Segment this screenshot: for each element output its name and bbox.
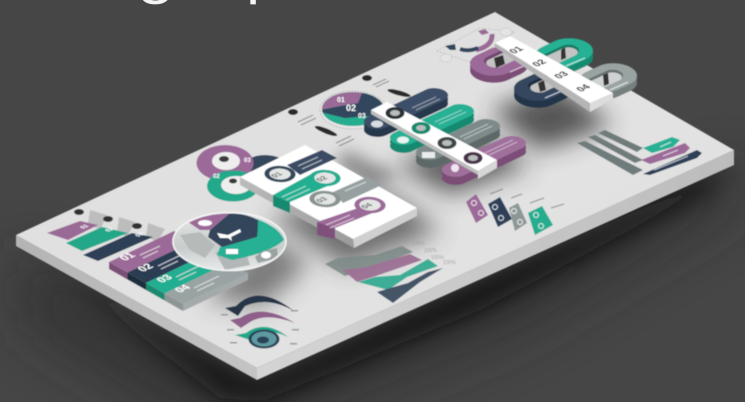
card captions: [490, 189, 564, 208]
panel: 3D pills with white bar: [358, 85, 532, 188]
card navy: [488, 197, 512, 227]
mauve donut: [196, 145, 254, 181]
strap 03 gray: [333, 177, 382, 203]
ribbon labels: 03: [135, 232, 146, 238]
bar icon 04: [464, 152, 482, 164]
lens map and wedges: [180, 213, 284, 270]
pie labels: 01: [337, 97, 345, 104]
card right side: [353, 208, 417, 248]
pill teal: [384, 101, 480, 156]
bar icon centers: [390, 110, 478, 161]
panel: L-shaped chevrons right: [577, 130, 702, 175]
bar icon 02: [412, 122, 430, 134]
card mauve: [466, 194, 488, 223]
strap 04 mauve: [317, 208, 380, 239]
mauve band: [343, 254, 422, 282]
stripe labels: [117, 251, 194, 294]
band labels: 100%: [431, 255, 444, 261]
dotted outline: [437, 28, 515, 62]
soft shadows on board: [205, 85, 612, 305]
stripe 04: [164, 262, 248, 304]
donut labels: [213, 158, 251, 180]
bar icon 01: [386, 107, 404, 119]
panel: striped block with lens: [109, 212, 286, 311]
teal donut center: [221, 176, 251, 194]
navy tab: [445, 44, 456, 50]
stripe captions: [140, 246, 219, 291]
teal donut icon: [229, 178, 237, 184]
callout circles: [440, 28, 512, 62]
U gray: [570, 58, 646, 105]
stripe labels: 01: [117, 251, 139, 262]
glass lens: [173, 212, 286, 270]
gray folded tabs: [88, 210, 165, 242]
teal donut: [207, 170, 259, 202]
board drop shadow: [16, 165, 745, 402]
card gray: [509, 203, 527, 231]
card top: [240, 145, 417, 239]
navy arc: [225, 296, 294, 316]
badge 01: [258, 162, 302, 186]
bar numbers: 03: [552, 70, 572, 81]
navy arc segment: [460, 48, 478, 50]
bar numbers: [507, 45, 594, 94]
card teal: [528, 206, 553, 235]
chevron mauve: [641, 143, 690, 164]
pie labels: 03: [358, 113, 366, 120]
badge 03: 03: [314, 196, 330, 204]
mauve donut icon: [219, 156, 229, 162]
pie labels: 02: [346, 103, 356, 113]
pill navy: [358, 85, 454, 140]
band labels: 100%: [412, 241, 425, 247]
navy band: [377, 268, 443, 303]
globe land: [252, 332, 276, 346]
band labels: [412, 241, 456, 266]
mauve arc: [230, 312, 295, 328]
teal band: [358, 259, 438, 290]
badge 04: 04: [359, 202, 375, 210]
gray band: [325, 246, 413, 276]
stripe sides: [109, 262, 183, 311]
ribbon 02: [66, 227, 128, 251]
pie slices: [322, 92, 384, 126]
stripe 01: [109, 231, 192, 272]
card left side: [240, 177, 354, 248]
stripe labels: 02: [135, 262, 157, 273]
panel: mini arc diagram top: [437, 28, 515, 62]
badge 02: [303, 166, 347, 190]
badge 02: 02: [314, 175, 330, 183]
ribbon 03: [83, 233, 153, 261]
mauve donut center: [212, 152, 240, 170]
lens icons: [198, 220, 271, 258]
globe: [248, 330, 280, 348]
stripe labels: 04: [172, 283, 194, 294]
panel: U shapes with numbered bar: [461, 33, 646, 113]
mauve arc: [476, 34, 492, 50]
badge 03: [303, 187, 347, 211]
icon blobs: [74, 209, 142, 229]
panel: pie chart with callouts: [288, 75, 411, 146]
numbered bar: [495, 36, 613, 112]
ribbon labels: 02: [105, 227, 116, 233]
pie labels: [337, 97, 366, 120]
callout icons: [288, 75, 411, 138]
stripe 03: [146, 252, 230, 294]
panel: arc charts with globe: [221, 296, 299, 348]
callout text lines: [298, 79, 389, 146]
chevron teal: [643, 137, 680, 153]
card icons: [472, 200, 544, 228]
U teal: [526, 33, 602, 80]
pill text lines: [412, 97, 517, 155]
panel: layered area chart: [325, 241, 456, 303]
white bar: [371, 102, 497, 179]
block right side: [183, 273, 248, 311]
panel: stair cards: [466, 189, 564, 235]
chevron navy: [643, 150, 702, 175]
bar numbers: 04: [574, 83, 594, 94]
strap 02 teal: [273, 173, 330, 213]
ribbon labels: 01: [80, 224, 91, 230]
bar numbers: 02: [530, 58, 550, 69]
strap 01 navy: [287, 150, 337, 175]
stripe labels: 03: [154, 273, 176, 284]
ribbon 01: [47, 221, 98, 240]
U mauve: [461, 41, 537, 88]
badge 04: [348, 193, 392, 217]
badge 01: 01: [269, 171, 285, 179]
strap text lines: [282, 157, 366, 228]
band labels: 100%: [424, 248, 437, 254]
bar numbers: 01: [507, 45, 527, 56]
gray strips: [577, 130, 643, 175]
mauve top piece: [478, 29, 489, 35]
teal arc: [235, 327, 288, 340]
pill gray: [410, 116, 506, 171]
chevron labels: [654, 142, 688, 170]
pill mauve: [436, 133, 532, 188]
panel: white card with badges: [240, 145, 417, 248]
ribbon labels: [80, 224, 146, 238]
band labels: 100%: [443, 260, 456, 266]
panel: donut charts behind card: [196, 145, 285, 202]
donut labels: 02: [213, 174, 220, 180]
U navy: [505, 66, 581, 113]
arc markers: [221, 310, 299, 344]
donut labels: 03: [244, 158, 251, 164]
panel: folded ribbons top left: [47, 209, 165, 261]
bar icon 03: [438, 137, 456, 149]
navy arc: [245, 155, 285, 175]
stripe 02: [128, 242, 211, 283]
pie dotted ring: [320, 91, 386, 129]
